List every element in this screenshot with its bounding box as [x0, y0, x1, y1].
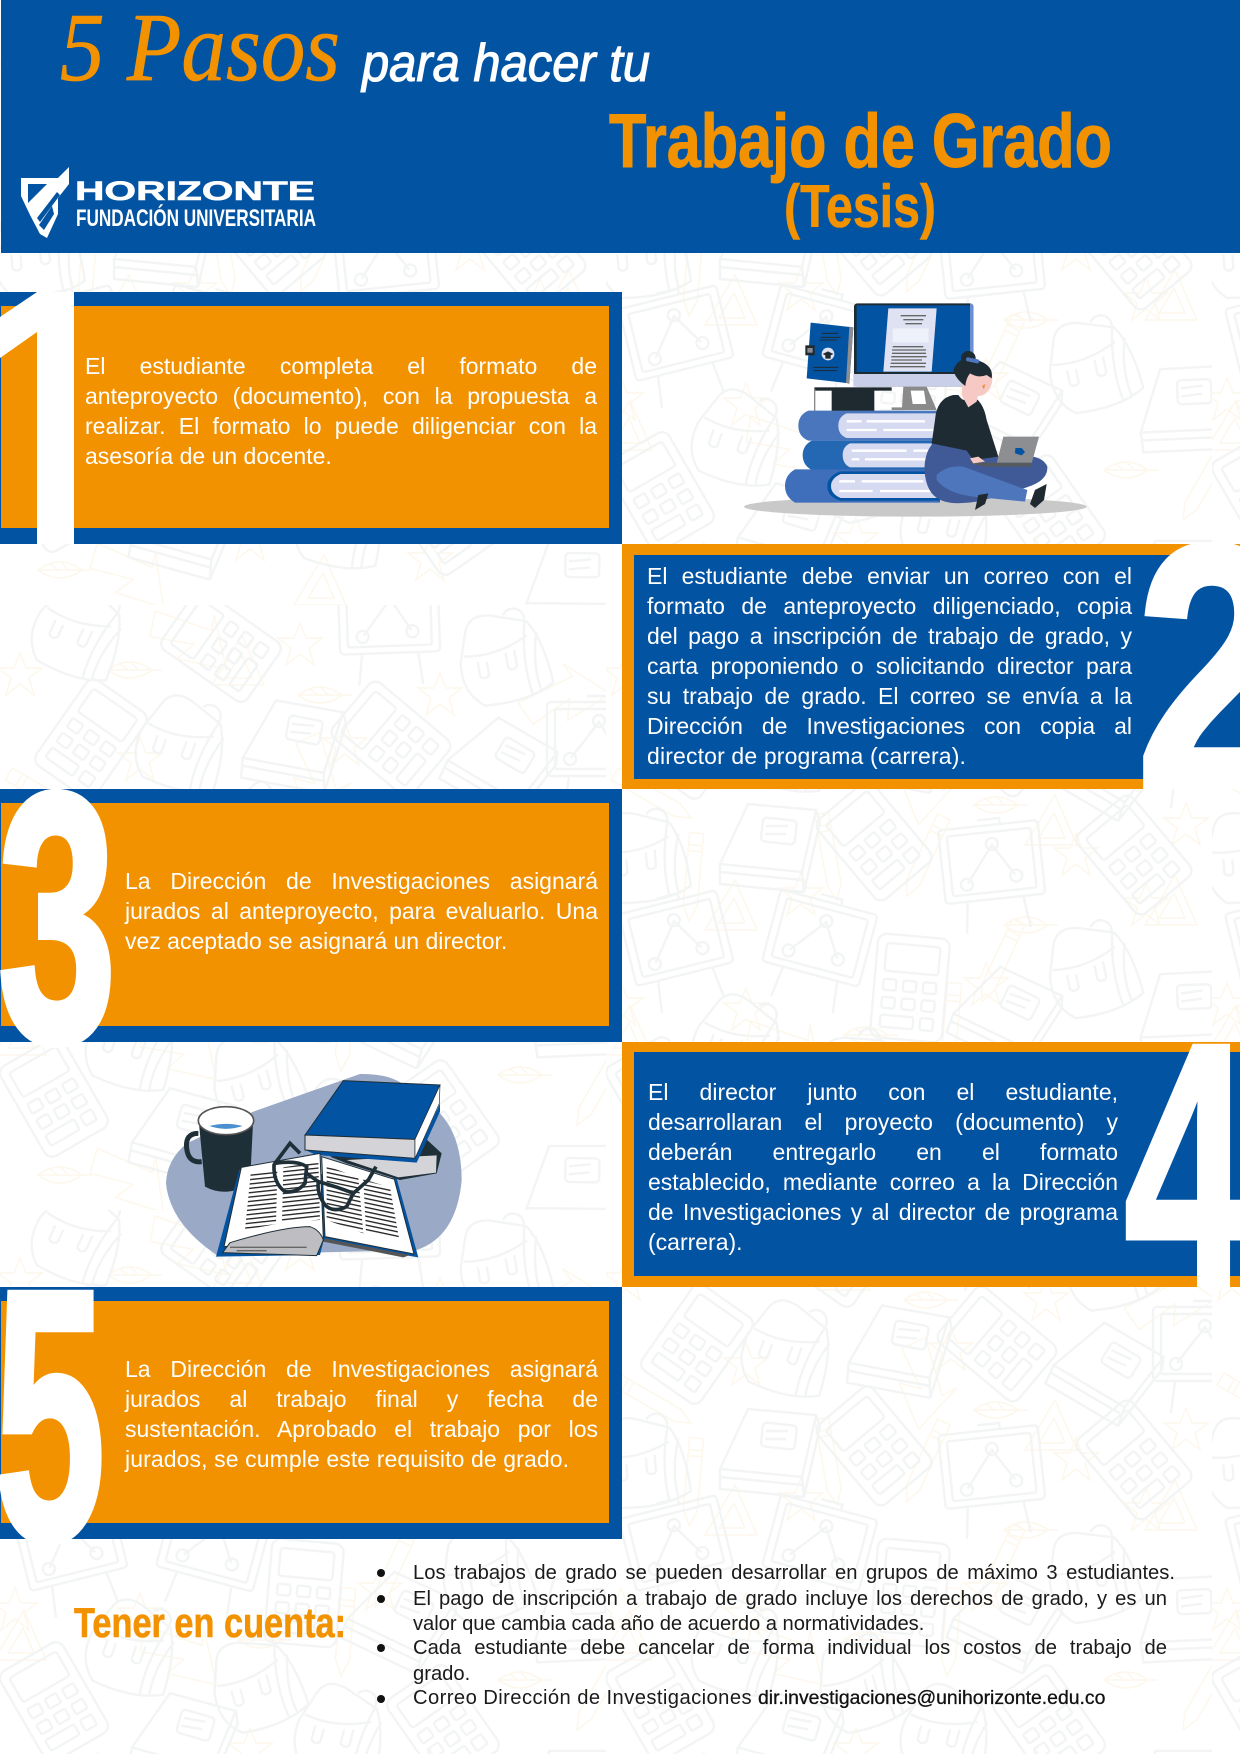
icon: closed books	[305, 1081, 442, 1180]
number 3: 3	[0, 720, 116, 1115]
text: step 1: realizar. El formato lo puede diligenciar con la	[85, 413, 597, 439]
panel: step 1	[0, 292, 622, 544]
icon: books stack	[785, 411, 940, 503]
icon: open book	[216, 1153, 418, 1257]
subtitle: (Tesis): (Tesis)	[784, 173, 936, 240]
text: step 4: desarrollaran el proyecto (documento) y	[648, 1109, 1118, 1135]
notes list: valor que cambia cada año de acuerdo a normatividades.	[413, 1613, 924, 1635]
logo wordmark: HORIZONTE	[75, 176, 315, 206]
text: step 5	[124, 1356, 598, 1472]
icon: graduation cap	[811, 387, 892, 433]
logo tagline: FUNDACIÓN UNIVERSITARIA	[76, 204, 316, 232]
illustration: open book, stacked books, mug and glasses	[166, 1074, 462, 1258]
notes list: grado.	[413, 1663, 470, 1685]
text: step 3	[124, 868, 598, 954]
notes list	[377, 1562, 1175, 1709]
text: step 4: establecido, mediante correo a la Dirección	[648, 1169, 1118, 1195]
text: step 1	[85, 353, 598, 469]
text: step 2: formato de anteproyecto diligenciado, copia	[647, 593, 1132, 619]
notes list: El pago de inscripción a trabajo de grado incluye los derechos de grado, y es un	[413, 1588, 1167, 1610]
notes list: Los trabajos de grado se pueden desarrollar en grupos de máximo 3 estudiantes.	[413, 1562, 1175, 1584]
panel: step 2	[622, 544, 1240, 789]
text: step 4: deberán entregarlo en el formato	[648, 1139, 1118, 1165]
header band	[1, 0, 1240, 253]
text: step 2: del pago a inscripción de trabajo de grado, y	[647, 623, 1132, 649]
text: step 5: jurados, se cumple este requisito de grado.	[125, 1446, 569, 1472]
text: step 2: carta proponiendo o solicitando director para	[647, 653, 1132, 679]
text: step 5: jurados al trabajo final y fecha de	[125, 1386, 598, 1412]
text: step 3: La Dirección de Investigaciones asignará	[125, 868, 598, 894]
illustration: student with books and computer	[744, 303, 1087, 517]
text: step 4: El director junto con el estudiante,	[648, 1079, 1118, 1105]
text: step 2: director de programa (carrera).	[647, 743, 966, 769]
logo: Horizonte	[21, 167, 316, 238]
panel: step 5	[0, 1287, 622, 1539]
text: step 2	[647, 563, 1132, 769]
icon: shield	[21, 167, 69, 238]
text: step 4: de Investigaciones y al director de programa	[648, 1199, 1118, 1225]
notes list: Cada estudiante debe cancelar de forma individual los costos de trabajo de	[413, 1637, 1167, 1659]
text: step 3: vez aceptado se asignará un director.	[125, 928, 507, 954]
text: step 2: Dirección de Investigaciones con copia al	[647, 713, 1132, 739]
number 1	[0, 292, 74, 544]
text: step 4: (carrera).	[648, 1229, 743, 1255]
panel: step 3	[0, 789, 622, 1042]
icon: monitor	[853, 303, 973, 410]
notes list: dir.investigaciones@unihorizonte.edu.co	[758, 1687, 1105, 1709]
icon: thesis book	[805, 323, 853, 384]
text: step 2: El estudiante debe enviar un correo con el	[647, 563, 1132, 589]
icon: glasses	[274, 1143, 376, 1210]
text: step 1: asesoría de un docente.	[85, 443, 332, 469]
text: step 2: su trabajo de grado. El correo se envía a la	[647, 683, 1132, 709]
notes list: Correo Dirección de Investigaciones	[413, 1687, 752, 1709]
title: para hacer tu: para hacer tu	[360, 34, 650, 93]
icon: student on laptop	[925, 351, 1047, 510]
title: Trabajo de Grado: Trabajo de Grado	[609, 99, 1112, 184]
text: step 1: El estudiante completa el formato de	[85, 353, 597, 379]
text: step 4	[648, 1079, 1118, 1255]
text: step 5: La Dirección de Investigaciones asignará	[125, 1356, 598, 1382]
text: step 5: sustentación. Aprobado el trabajo por los	[125, 1416, 598, 1442]
text: step 3: jurados al anteproyecto, para evaluarlo. Una	[125, 898, 598, 924]
text: step 1: anteproyecto (documento), con la propuesta a	[85, 383, 597, 409]
panel: step 4	[622, 1042, 1240, 1287]
icon: mug	[186, 1107, 254, 1192]
